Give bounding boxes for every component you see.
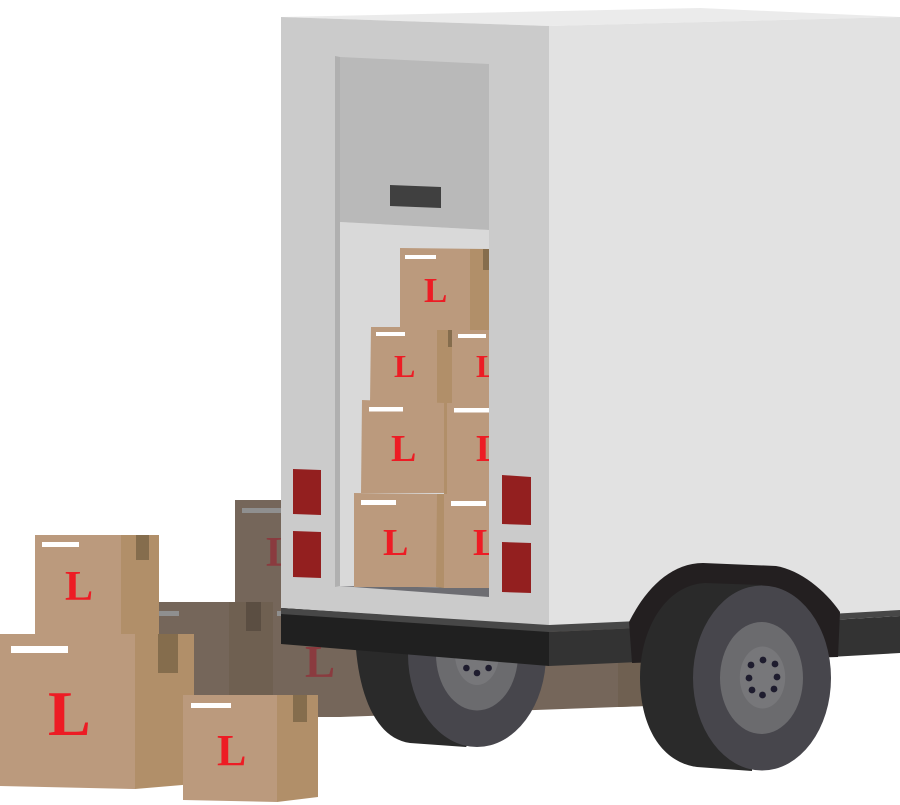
second row left box — [370, 327, 452, 403]
third row left box: L — [391, 428, 416, 470]
third row right box — [447, 403, 489, 494]
box: large lower left: L — [48, 678, 91, 749]
cargo floor — [340, 586, 489, 597]
rear wheel — [355, 562, 546, 747]
wheel arch — [629, 563, 840, 663]
top cargo box — [400, 248, 490, 330]
third row left box — [361, 400, 447, 494]
door frame edge — [335, 56, 340, 587]
cargo boxes inside the truck — [354, 248, 501, 588]
truck roof — [281, 8, 900, 26]
box: upper left stack — [35, 535, 159, 635]
bottom row left box — [354, 493, 444, 588]
roller door — [340, 57, 489, 230]
truck body — [281, 8, 900, 626]
bottom row left box: L — [383, 522, 408, 564]
bottom row right box: L — [473, 522, 498, 564]
door handle — [390, 185, 441, 208]
front wheel — [640, 583, 831, 771]
shadowed boxes behind the truck: L — [305, 637, 335, 687]
second row right box — [452, 330, 489, 403]
box: small front: L — [217, 726, 246, 775]
shadowed boxes behind the truck — [159, 500, 645, 722]
second row left box: L — [394, 348, 415, 384]
box: large lower left — [0, 634, 194, 789]
shadowed boxes behind the truck: L — [266, 530, 294, 576]
bottom row right box — [444, 494, 489, 588]
third row right box: L — [476, 428, 501, 470]
truck rear panel — [281, 17, 549, 626]
second row right box: L — [476, 348, 497, 384]
bumper — [281, 608, 900, 666]
top cargo box: L — [424, 271, 447, 310]
truck side panel — [549, 17, 900, 626]
box: upper left stack: L — [65, 564, 93, 610]
box: small front — [183, 695, 318, 802]
tail lights — [293, 469, 531, 593]
cargo interior — [340, 222, 489, 588]
